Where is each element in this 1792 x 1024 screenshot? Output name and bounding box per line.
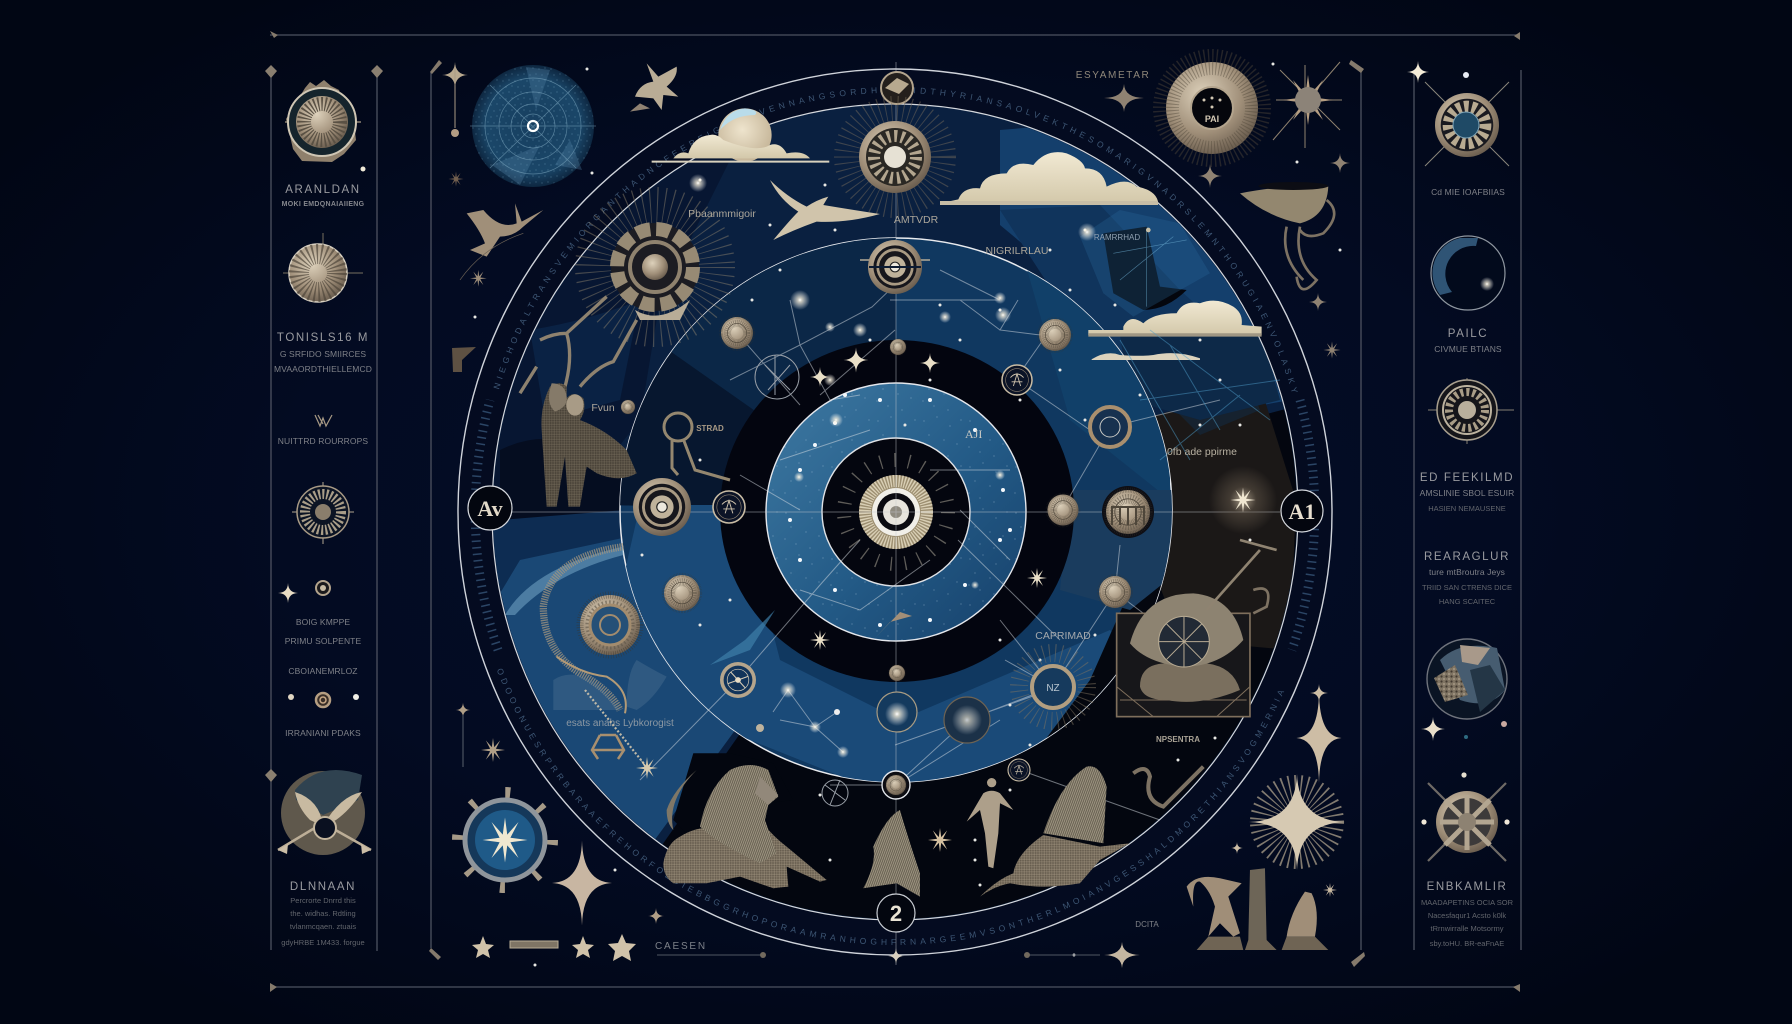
- icon: small ground star: [928, 828, 952, 852]
- icon: medallion right big: [1102, 486, 1154, 538]
- icon: small wand star: [442, 62, 468, 137]
- icon: statues: [1187, 868, 1328, 950]
- icon: nebula: [1209, 466, 1277, 534]
- label: CAPRIMAD: CAPRIMAD: [1035, 630, 1091, 642]
- icon: medallion upper right 3: [1090, 407, 1130, 447]
- icon: compass rose: [458, 793, 552, 887]
- outer ring band: [457, 68, 1333, 956]
- text: right subtitle: HASIEN NEMAUSENE: [1428, 504, 1506, 513]
- text: PRIMU SOLPENTE: PRIMU SOLPENTE: [285, 636, 361, 646]
- icon: left small medallion: [713, 491, 745, 523]
- icon: top right star: [1407, 61, 1429, 83]
- icon: lion right: [980, 766, 1130, 897]
- icon: medallion right inner: [1048, 494, 1078, 526]
- text: right subtitle: AMSLINIE SBOL ESUIR: [1420, 488, 1514, 498]
- icon: left ring and dots: [288, 693, 359, 707]
- icon: small stars upper right: [1198, 153, 1350, 358]
- text: right caption one: TRIID SAN CTRENS DICE: [1422, 583, 1512, 592]
- icon: small coin: [621, 400, 635, 414]
- icon: lower constellation stars: [756, 682, 849, 758]
- icon: center disc bright stars: [794, 413, 1005, 589]
- icon: globe: [1427, 639, 1507, 719]
- icon: dial medallion right: NZ: [1046, 683, 1060, 694]
- panel: right column: [1407, 61, 1514, 948]
- label: esats anahs Lybkorogist: esats anahs Lybkorogist: [566, 718, 674, 729]
- sparkle line: [462, 715, 464, 767]
- label: NIGRILRLAU: NIGRILRLAU: [985, 245, 1049, 257]
- dark behind goat: [500, 439, 625, 520]
- icon: small triangle: [710, 610, 775, 665]
- icon: left medallion three: [292, 482, 354, 544]
- panel: left column: [274, 80, 372, 947]
- text: left caption: tvlanmcqaen. ztuais: [290, 922, 356, 931]
- icon: bottom right connector star: [1024, 942, 1140, 968]
- icon: big sun medallion: [593, 205, 717, 329]
- icon: right A marker: A1: [1289, 499, 1315, 524]
- icon: small gate: [592, 735, 624, 759]
- icon: lower left stars: [456, 702, 664, 924]
- icon: medallion upper right 2: [1002, 365, 1032, 395]
- icon: number 2 marker: 2: [890, 901, 902, 926]
- icon: starred globe top left: [470, 65, 596, 187]
- icon: top rim medallion: [881, 72, 913, 104]
- lower left blue: [497, 538, 734, 839]
- icon: key ring: [664, 413, 730, 480]
- icon: small dial 2: [890, 339, 906, 355]
- icon: right medallion one: [1425, 82, 1509, 166]
- text: left caption: Percrorte Dnrrd this: [290, 896, 356, 905]
- text: left subtitle two: G SRFIDO SMIIRCES: [280, 349, 366, 359]
- icon: ornate chest: [1117, 540, 1277, 717]
- icon: moon on cloud: [652, 108, 829, 163]
- inner dark disc: [822, 438, 970, 586]
- icon: small dial 1: [721, 317, 753, 349]
- icon: bottom stars row: [472, 934, 636, 961]
- lower right black: [662, 410, 1296, 918]
- heading: ENBKAMLIR: ENBKAMLIR: [1427, 881, 1507, 893]
- frame lines: [265, 31, 1521, 992]
- icon: crescent: [505, 547, 667, 713]
- heading: ED FEEKILMD: ED FEEKILMD: [1420, 472, 1514, 484]
- icon: small left star: [448, 172, 464, 186]
- dark annulus: [720, 340, 1074, 682]
- icon: sketched circle: [755, 355, 799, 399]
- text: right caption two: [1421, 898, 1514, 948]
- heading: CAESEN: CAESEN: [655, 941, 707, 952]
- icon: crescent medallion: [580, 595, 640, 655]
- text: left caption: [281, 896, 365, 947]
- icon: star disc: [877, 692, 917, 732]
- icon: cloaked figure: [863, 810, 920, 897]
- axis lines: [512, 62, 1280, 965]
- text: right caption two: Nacesfaqur1 Acsto k0lk: [1428, 911, 1506, 920]
- icon: number 2 marker: [877, 894, 915, 932]
- icon: left medallion two: [283, 233, 363, 302]
- label: DCITA: DCITA: [1135, 920, 1159, 929]
- icon: right medallion three: [1421, 772, 1510, 861]
- label: STRAD: STRAD: [696, 424, 724, 433]
- text: left caption: gdyHRBE 1M433. forgue: [281, 938, 365, 947]
- icon: bird: [770, 180, 880, 240]
- inner sky ring regions: [600, 230, 1180, 800]
- label: AMTVDR: AMTVDR: [894, 214, 939, 226]
- icon: axis bottom diamond: [888, 948, 904, 964]
- icon: left dot: [360, 166, 366, 172]
- icon: dial medallion right: [1019, 653, 1087, 721]
- icon: lower star node: [636, 757, 658, 779]
- icon: top sun medallion: [847, 109, 943, 205]
- icon: spiked sun: [1273, 62, 1342, 148]
- icon: big cloud: [940, 152, 1158, 203]
- label: Fvun: Fvun: [591, 402, 615, 414]
- central gold dial: [859, 475, 933, 549]
- text: right caption two: MAADAPETINS OCIA SOR: [1421, 898, 1514, 907]
- text: right caption two: sby.toHU. BR-eaFnAE: [1430, 939, 1504, 948]
- icon: lion left: [663, 753, 827, 888]
- icon: right sparkles: [1231, 684, 1342, 897]
- text: CIVMUE BTIANS: CIVMUE BTIANS: [1434, 344, 1502, 354]
- icon: bright upper right medal: [1099, 576, 1131, 608]
- icon: chain: [585, 690, 645, 765]
- upper left navy: [494, 158, 730, 488]
- text: left caption: the. widhas. Rdtling: [290, 909, 356, 918]
- icon: medallion upper right 1: [1039, 319, 1071, 351]
- icon: middle cloud: [1088, 301, 1262, 337]
- label: 0fb ade ppirme: 0fb ade ppirme: [1167, 446, 1237, 458]
- icon: crescent ring: [1431, 236, 1505, 310]
- text: CBOIANEMRLOZ: CBOIANEMRLOZ: [288, 666, 358, 676]
- icon: right A marker: [1281, 490, 1323, 532]
- outer ring band: NIEGHODALTRANSVEMIORGANTHADNCFEEREIGASKFVENNANGSORDHPMOIDTHYRIANSAOLVEKTHESOMARIGVNADRSLEMNTHORUGIAENVOLASKYRNIMEOSTHRAV: [494, 87, 1298, 392]
- heading: TONISLS16 M: TONISLS16 M: [277, 332, 369, 344]
- icon: left leaping creature: [460, 203, 543, 287]
- label: small inner text: AJI: [965, 427, 982, 441]
- icon: small sparkle: [1104, 84, 1144, 112]
- heading: DLNNAAN: DLNNAAN: [290, 881, 356, 893]
- text: right caption one: HANG SCAITEC: [1439, 597, 1496, 606]
- icon: globe stars: [1421, 717, 1507, 741]
- icon: dark ship shape: [1080, 210, 1210, 317]
- label: NPSENTRA: NPSENTRA: [1156, 735, 1200, 744]
- label: Pbaanmmigoir: Pbaanmmigoir: [688, 208, 756, 220]
- icon: small v mark: [315, 415, 332, 426]
- text: NUITTRD ROURROPS: NUITTRD ROURROPS: [278, 436, 368, 446]
- icon: arrow in disc: [875, 612, 912, 638]
- icon: upper medallion: [860, 240, 930, 294]
- text: right caption two: tRrnwirralle Motsormy: [1431, 924, 1504, 933]
- cloud ground line: [940, 201, 1158, 205]
- icon: winged emblem: [278, 770, 371, 855]
- text: Cd MIE IOAFBIIAS: Cd MIE IOAFBIIAS: [1431, 187, 1505, 197]
- icon: right medallion two: [1428, 378, 1514, 444]
- heading: ESYAMETAR: ESYAMETAR: [1076, 70, 1150, 81]
- text: left subtitle two: MVAAORDTHIELLEMCD: [274, 364, 372, 374]
- text: right caption one: [1422, 567, 1512, 606]
- icon: sketch circle lower: [822, 780, 848, 806]
- icon: lower cloud: [1092, 353, 1200, 360]
- text: left subtitle one: MOKI EMDQNAIAIIENG: [282, 201, 365, 208]
- icon: left A marker: [468, 486, 512, 530]
- bottom left connector: [657, 952, 766, 958]
- chart: celestial wheel: [457, 62, 1342, 966]
- sky stars: [475, 64, 1340, 965]
- icon: goat creature: [520, 297, 637, 507]
- icon: bottom knob: [882, 771, 910, 799]
- icon: bottom axis knob: [889, 665, 905, 681]
- icon: left triangle glyph: [452, 347, 476, 372]
- text: right subtitle: [1420, 488, 1514, 513]
- icon: left center medallion: [633, 478, 691, 536]
- icon: small seal: [1008, 759, 1030, 781]
- icon: nebula disc: [944, 697, 990, 743]
- icon: burst: [1249, 774, 1345, 870]
- icon: annulus stars: [810, 348, 1047, 650]
- outer ring band: ODOOONUESRPRRBARAAEFREHORFOEUIEBBGGRHOPORAAMRANHOGHFRNARGEEMVSONTHERLMOIANVGESSHALDMORETHIANSVOGMERNIA: [498, 668, 1284, 945]
- text: PAILC: PAILC: [1448, 328, 1488, 340]
- icon: flying creature: [630, 63, 678, 112]
- icon: upper constellation stars: [689, 174, 1096, 386]
- icon: moon coin: [1166, 62, 1258, 154]
- icon: right dot: [1463, 72, 1469, 78]
- icon: bowl: [1240, 182, 1334, 289]
- icon: left medallion one: [285, 80, 361, 162]
- heading: REARAGLUR: REARAGLUR: [1424, 551, 1510, 563]
- icon: left A marker: Av: [477, 496, 503, 521]
- constellation lines: [640, 270, 1240, 820]
- icon: serpent: [1133, 767, 1203, 807]
- disc stars: [790, 395, 1010, 625]
- text: IRRANIANI PDAKS: IRRANIANI PDAKS: [285, 728, 361, 738]
- icon: lower left dial: [720, 662, 756, 698]
- icon: dancing figure: [967, 778, 1013, 868]
- upper right blue: [1000, 125, 1290, 420]
- sky ring colored regions: [494, 128, 1296, 918]
- text: right caption one: ture mtBroutra Jeys: [1429, 567, 1505, 577]
- label: RAMRRHAD: RAMRRHAD: [1094, 233, 1140, 242]
- text: BOIG KMPPE: BOIG KMPPE: [296, 617, 350, 627]
- icon: tall sparkle: [552, 840, 612, 926]
- icon: right constellation web: [1120, 330, 1280, 460]
- blue disc: [766, 383, 1026, 641]
- heading: ARANLDAN: ARANLDAN: [285, 184, 361, 196]
- icon: left small star and ring: [278, 581, 330, 603]
- icon: lower medallion: [664, 575, 700, 611]
- text: left subtitle two: [274, 349, 372, 374]
- icon: moon coin: PAI: [1205, 114, 1219, 124]
